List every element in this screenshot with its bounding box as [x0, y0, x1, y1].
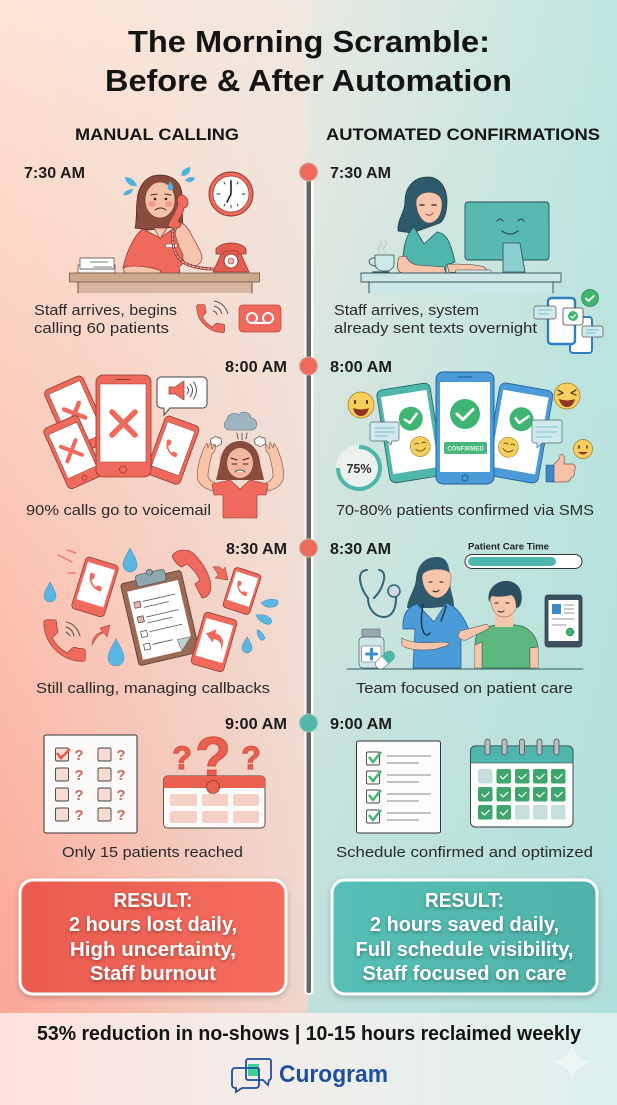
ground line [347, 668, 583, 670]
calendar all confirmed [470, 739, 573, 827]
patient care time label: Patient Care Time [468, 542, 549, 552]
emoji laughing right [554, 383, 580, 409]
icon: voicemail [239, 305, 281, 332]
emoji laughing left [348, 392, 374, 418]
illustration: failed calls phones [42, 374, 207, 490]
time label 7:30 left: 7:30 AM [24, 165, 85, 182]
checklist with question marks: ? [116, 747, 126, 764]
desk [361, 273, 561, 293]
phone small right [222, 567, 262, 615]
phone lower with return arrow [190, 611, 238, 673]
time label 8:00 left: 8:00 AM [225, 359, 287, 376]
nurse stethoscope [421, 604, 446, 635]
sound waves [66, 622, 80, 636]
handset [168, 195, 188, 228]
checklist with question marks: ? [74, 747, 84, 764]
nurse body [403, 603, 469, 668]
result box: manual: RESULT: [114, 890, 192, 912]
time label 9:00 right: 9:00 AM [330, 716, 392, 733]
arrow down right [213, 567, 228, 580]
checklist with question marks: ? [116, 807, 126, 824]
nurse arm on patient [402, 624, 490, 650]
hair [216, 441, 264, 480]
result box: automated: Staff focused on care [362, 963, 566, 985]
stethoscope [360, 570, 396, 617]
stethoscope chest piece [388, 585, 400, 597]
heading: automated confirmations: AUTOMATED CONFIRMATIONS [326, 125, 600, 144]
heading: manual calling: MANUAL CALLING [75, 125, 239, 144]
checklist with question marks: ? [74, 767, 84, 784]
illustration: nurse with patient [347, 542, 583, 671]
telephone [213, 243, 249, 272]
bubble left [370, 422, 399, 445]
sweat drops [123, 167, 195, 195]
result box: automated: 2 hours saved daily, [370, 914, 559, 936]
arm on desk [123, 266, 161, 274]
illustration: stressed staff at desk [70, 167, 260, 293]
title: The Morning Scramble: [128, 24, 490, 59]
checklist with question marks: ? [74, 787, 84, 804]
footer statistic: 53% reduction in no-shows | 10-15 hours reclaimed weekly [37, 1023, 582, 1045]
result box: manual [20, 880, 286, 994]
timeline [300, 163, 318, 995]
result box: automated [332, 880, 597, 994]
result box: manual: High uncertainty, [70, 939, 236, 961]
clipboard [119, 562, 200, 666]
caption: staff arrives manual [34, 302, 177, 337]
sparkle [552, 1044, 592, 1080]
raised arm holding phone [175, 222, 202, 266]
hair [135, 175, 183, 230]
caption: staff arrives automated: Staff arrives, system [334, 302, 479, 319]
blue center phone: CONFIRMED [447, 446, 484, 452]
caption: staff arrives manual: calling 60 patients [34, 320, 169, 337]
icon: ringing phone [197, 301, 228, 333]
nurse face [422, 569, 451, 598]
footer band [0, 1013, 617, 1105]
body [123, 229, 193, 274]
caption: staff arrives automated [334, 302, 538, 337]
phone with handset right [145, 415, 200, 485]
emoji smile small [574, 440, 592, 458]
arms [397, 256, 446, 273]
checklist with question marks: ? [74, 807, 84, 824]
desk [70, 273, 260, 293]
body [212, 480, 268, 518]
bubble right [532, 420, 562, 448]
title [105, 24, 512, 98]
phone with x bottom left [42, 414, 104, 490]
time label 8:00 right: 8:00 AM [330, 359, 392, 376]
blue center phone [436, 372, 494, 484]
checklist with question marks: ? [116, 787, 126, 804]
water drops [44, 548, 278, 666]
illustration: relaxed staff at computer [361, 177, 561, 293]
caption: staff arrives manual: Staff arrives, begins [34, 302, 177, 319]
hair [398, 177, 447, 233]
caption: team focused: Team focused on patient care [356, 680, 573, 697]
pill [373, 649, 397, 671]
calendar with question marks: ? [195, 726, 231, 791]
illustration: frustrated staff [197, 412, 284, 518]
face [227, 448, 253, 478]
central phone with x [96, 375, 151, 477]
result box: manual: 2 hours lost daily, [69, 914, 237, 936]
speaker bubble [157, 377, 207, 415]
donut 75 percent [338, 447, 380, 489]
result box: automated: Full schedule visibility, [356, 939, 574, 961]
curogram logo icon [232, 1059, 271, 1092]
papers [78, 258, 115, 273]
checklist with question marks: ? [116, 767, 126, 784]
alert lines [58, 550, 76, 573]
patient [475, 581, 538, 668]
result box: automated: RESULT: [425, 890, 504, 912]
storm cloud [224, 412, 257, 440]
patient care progress bar [465, 554, 582, 568]
caption: staff arrives automated: already sent texts overnight [334, 320, 538, 337]
teal phone [376, 382, 444, 484]
calendar with question marks: ? [241, 740, 261, 776]
wall clock [209, 172, 253, 216]
thumbs up [546, 454, 575, 482]
curogram wordmark: Curogram [279, 1061, 388, 1088]
arrow up right [92, 625, 110, 645]
large handset lower left [44, 620, 85, 661]
nurse hair [407, 557, 454, 608]
caption: schedule confirmed: Schedule confirmed and optimized [336, 844, 593, 861]
face [145, 182, 175, 218]
caption: confirmed via sms: 70-80% patients confirmed via SMS [336, 502, 594, 519]
calendar with question marks [164, 726, 265, 828]
anger puffs [210, 436, 266, 446]
time label 9:00 left: 9:00 AM [225, 716, 287, 733]
body [403, 227, 455, 273]
calendar with question marks: ? [172, 740, 192, 776]
tablet [545, 595, 582, 647]
monitor [465, 202, 549, 272]
illustration: confirmed phones [338, 372, 592, 489]
coffee cup [369, 241, 394, 272]
caption: voicemail: 90% calls go to voicemail [26, 502, 211, 519]
handset upper right [172, 550, 211, 598]
time label 7:30 right: 7:30 AM [330, 165, 391, 182]
donut 75 percent: 75% [346, 462, 372, 476]
medicine bottle [359, 629, 384, 668]
time label 8:30 right: 8:30 AM [330, 541, 391, 558]
phone with x top left [43, 374, 111, 457]
checklist all checked [356, 741, 440, 833]
blue right phone [484, 382, 554, 484]
title: Before & After Automation [105, 63, 512, 98]
caption: still calling: Still calling, managing callbacks [36, 680, 270, 697]
checklist with question marks [44, 735, 137, 833]
phone top left [71, 556, 119, 618]
arms [197, 442, 284, 491]
face [416, 192, 442, 223]
keyboard [456, 270, 491, 274]
caption: only 15 reached: Only 15 patients reached [62, 844, 243, 861]
icon: automated phones [534, 290, 603, 353]
result box: manual: Staff burnout [90, 963, 216, 985]
time label 8:30 left: 8:30 AM [226, 541, 287, 558]
phone cord [173, 230, 214, 269]
illustration: callback chaos [44, 548, 278, 673]
